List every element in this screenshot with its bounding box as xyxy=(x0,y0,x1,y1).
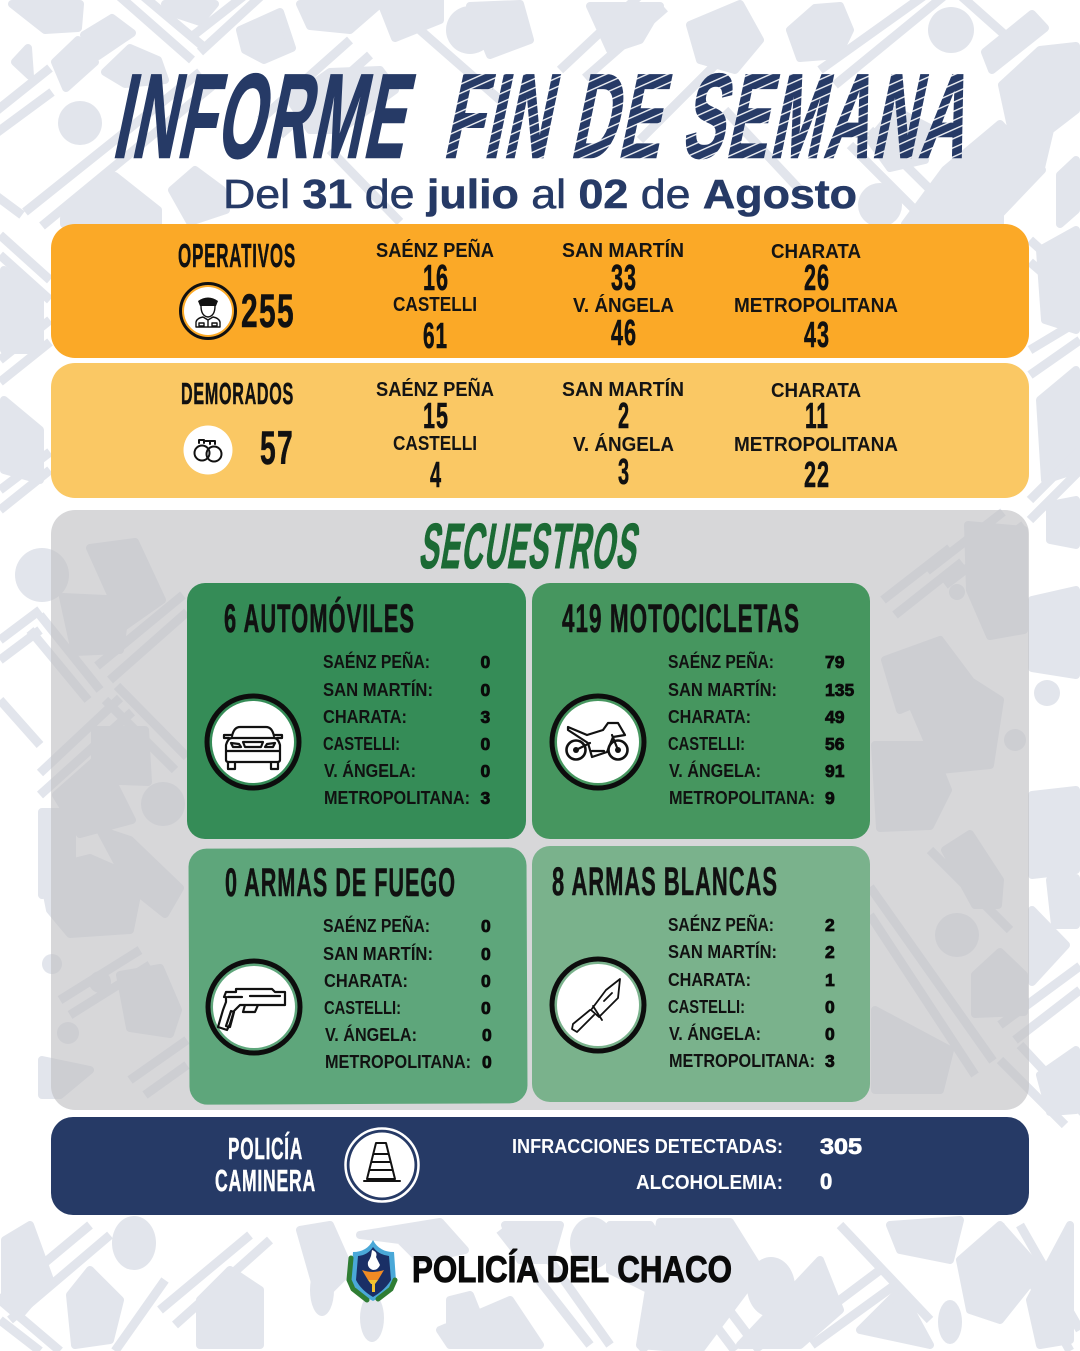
region list: 0 xyxy=(481,998,491,1018)
region list: METROPOLITANA: xyxy=(325,1051,471,1072)
region list: CHARATA: xyxy=(324,970,408,991)
region list xyxy=(668,914,835,1071)
demorados by region: V. ÁNGELA xyxy=(573,433,674,456)
card title: 419 MOTOCICLETAS xyxy=(562,597,800,641)
region list: 2 xyxy=(825,915,835,935)
region list: 0 xyxy=(480,680,490,700)
icon: motorcycle xyxy=(552,696,644,788)
region list: 0 xyxy=(482,1052,492,1072)
operativos by region: V. ÁNGELA xyxy=(573,294,674,317)
demorados by region: METROPOLITANA xyxy=(734,433,898,456)
footer text: POLICÍA DEL CHACO xyxy=(412,1249,732,1290)
operativos by region: CASTELLI xyxy=(393,293,477,316)
operativos by region: METROPOLITANA xyxy=(734,294,898,317)
total demorados: 57 xyxy=(260,421,294,474)
infractions stats: 0 xyxy=(820,1169,832,1194)
title xyxy=(106,49,988,183)
operativos by region: CHARATA xyxy=(771,240,861,263)
subtitle: Del 31 de julio al 02 de Agosto xyxy=(223,171,857,217)
infractions stats: ALCOHOLEMIA: xyxy=(636,1171,783,1194)
panel: secuestros xyxy=(51,510,1029,1110)
region list: 0 xyxy=(480,652,490,672)
region list: 0 xyxy=(482,1025,492,1045)
card: armas blancas xyxy=(532,846,870,1102)
panel: secuestros: SECUESTROS xyxy=(416,510,646,582)
icon: police officer xyxy=(180,284,236,338)
icon: car xyxy=(207,696,299,788)
region list: 3 xyxy=(480,707,490,727)
region list: SAÉNZ PEÑA: xyxy=(668,914,774,935)
region list: 56 xyxy=(825,734,845,754)
operativos by region xyxy=(376,239,898,356)
region list: CASTELLI: xyxy=(668,733,745,754)
region list xyxy=(323,915,492,1072)
demorados by region: 15 xyxy=(423,395,449,436)
card: motocicletas xyxy=(532,583,870,839)
demorados by region: SAÉNZ PEÑA xyxy=(376,378,494,401)
demorados by region: CASTELLI xyxy=(393,432,477,455)
region list: CHARATA: xyxy=(323,706,407,727)
infractions stats xyxy=(512,1134,862,1194)
card title: 6 AUTOMÓVILES xyxy=(224,595,415,641)
demorados by region: 11 xyxy=(805,395,829,436)
demorados by region: 22 xyxy=(804,454,830,495)
region list: V. ÁNGELA: xyxy=(324,760,416,781)
region list: CHARATA: xyxy=(668,706,751,727)
region list: CHARATA: xyxy=(668,969,751,990)
region list: METROPOLITANA: xyxy=(324,787,470,808)
region list: 0 xyxy=(480,734,490,754)
icon: pistol xyxy=(208,961,300,1053)
title: informe: INFORME xyxy=(106,49,427,183)
operativos by region: 33 xyxy=(611,257,637,298)
region list: 0 xyxy=(480,761,490,781)
region list: SAÉNZ PEÑA: xyxy=(323,915,430,936)
demorados heading: DEMORADOS xyxy=(181,376,294,411)
region list: SAN MARTÍN: xyxy=(668,679,777,700)
operativos by region: 16 xyxy=(423,257,449,298)
panel: demorados xyxy=(51,363,1029,498)
region list: V. ÁNGELA: xyxy=(325,1024,417,1045)
icon: knife xyxy=(552,959,644,1051)
demorados by region: 4 xyxy=(430,454,442,495)
card: armas de fuego xyxy=(188,847,528,1105)
region list: 2 xyxy=(825,942,835,962)
region list: 135 xyxy=(825,680,854,700)
region list: SAÉNZ PEÑA: xyxy=(323,651,430,672)
operativos by region: SAN MARTÍN xyxy=(562,239,684,262)
region list: CASTELLI: xyxy=(668,996,745,1017)
region list: CASTELLI: xyxy=(324,997,401,1018)
icon: handcuffs xyxy=(184,426,232,474)
demorados by region: SAN MARTÍN xyxy=(562,378,684,401)
region list: 0 xyxy=(825,997,835,1017)
operativos by region: 61 xyxy=(423,315,448,356)
region list xyxy=(668,651,854,808)
region list: 3 xyxy=(480,788,490,808)
region list: 0 xyxy=(481,916,491,936)
region list: 0 xyxy=(481,944,491,964)
demorados by region xyxy=(376,378,898,495)
card title: 0 ARMAS DE FUEGO xyxy=(225,861,456,905)
panel: policia caminera xyxy=(51,1117,1029,1215)
operativos heading: OPERATIVOS xyxy=(178,237,296,274)
caminera heading xyxy=(215,1131,316,1198)
infractions stats: INFRACCIONES DETECTADAS: xyxy=(512,1135,783,1158)
panel: operativos xyxy=(51,224,1029,358)
operativos by region: SAÉNZ PEÑA xyxy=(376,239,494,262)
region list: CASTELLI: xyxy=(323,733,400,754)
region list: METROPOLITANA: xyxy=(669,787,815,808)
region list xyxy=(323,651,490,808)
region list: SAN MARTÍN: xyxy=(668,941,777,962)
region list: 3 xyxy=(825,1051,835,1071)
total operativos: 255 xyxy=(241,284,295,337)
region list: 49 xyxy=(825,707,845,727)
region list: METROPOLITANA: xyxy=(669,1050,815,1071)
caminera heading: POLICÍA xyxy=(228,1131,303,1166)
region list: SAN MARTÍN: xyxy=(323,679,433,700)
icon: traffic cone xyxy=(346,1128,418,1202)
region list: 91 xyxy=(825,761,845,781)
operativos by region: 46 xyxy=(611,312,637,353)
infractions stats: 305 xyxy=(820,1134,862,1159)
icon: police shield xyxy=(349,1240,396,1301)
region list: 9 xyxy=(825,788,835,808)
footer logo xyxy=(349,1240,732,1301)
region list: V. ÁNGELA: xyxy=(669,1023,761,1044)
demorados by region: 3 xyxy=(618,451,630,492)
card title: 8 ARMAS BLANCAS xyxy=(552,860,778,904)
card: automoviles xyxy=(187,583,526,839)
region list: SAÉNZ PEÑA: xyxy=(668,651,774,672)
region list: 0 xyxy=(481,971,491,991)
region list: SAN MARTÍN: xyxy=(323,943,433,964)
demorados by region: 2 xyxy=(618,395,630,436)
region list: V. ÁNGELA: xyxy=(669,760,761,781)
region list: 1 xyxy=(825,970,835,990)
region list: 0 xyxy=(825,1024,835,1044)
demorados by region: CHARATA xyxy=(771,379,861,402)
operativos by region: 26 xyxy=(804,257,830,298)
region list: 79 xyxy=(825,652,845,672)
caminera heading: CAMINERA xyxy=(215,1163,316,1198)
operativos by region: 43 xyxy=(804,314,830,355)
